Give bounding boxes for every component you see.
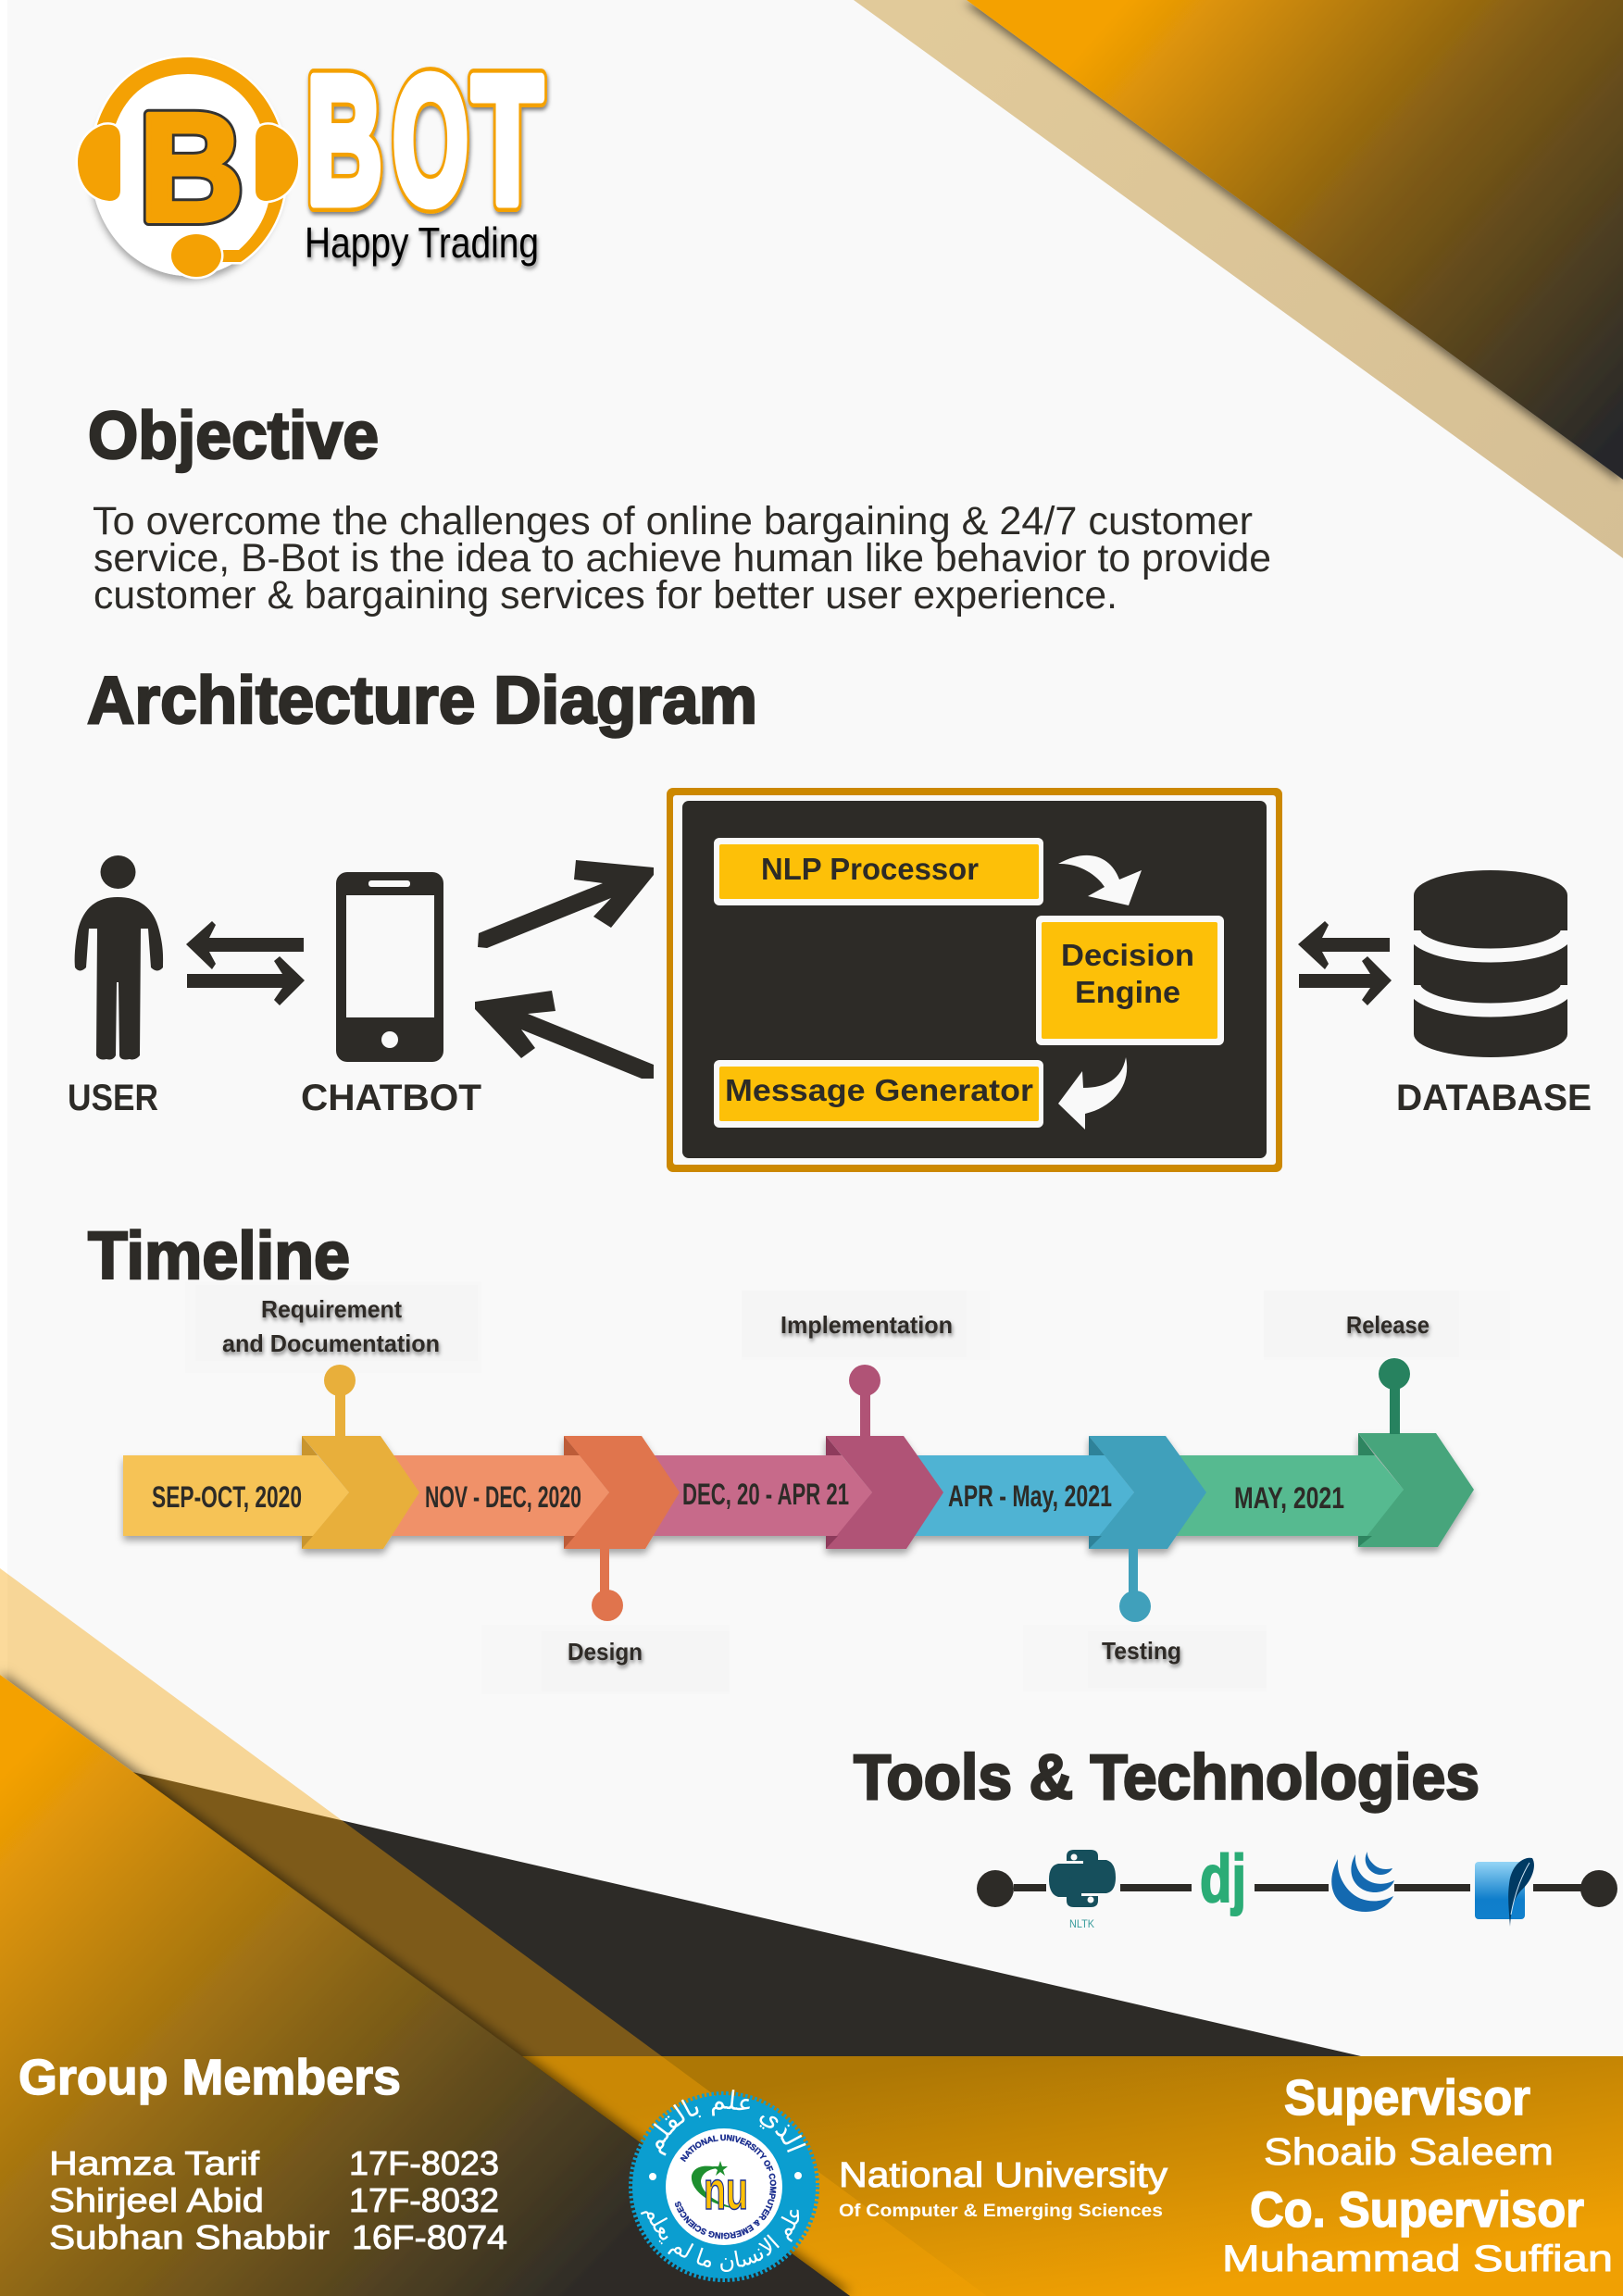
member: Shirjeel Abid: 17F-8032 [349, 2181, 499, 2219]
label: USER: USER [68, 1078, 158, 1118]
text block: objective description: customer & bargaining services for better user experience. [94, 573, 1117, 618]
member: Hamza Tarif [49, 2144, 499, 2182]
heading: Supervisor: Supervisor [1284, 2070, 1530, 2126]
top right corner decoration [854, 0, 1623, 558]
member: Shirjeel Abid: Shirjeel Abid [49, 2181, 264, 2219]
logo wordmark BOT: T [472, 39, 543, 242]
pin: release [1379, 1358, 1410, 1434]
icon: headset and B letter: B [139, 82, 243, 254]
milestone labels: and Documentation [222, 1329, 440, 1357]
university seal [629, 2090, 819, 2282]
text block: objective description: service, B-Bot is the idea to achieve human like behavior to provide [94, 536, 1271, 580]
member: Hamza Tarif: 17F-8023 [349, 2144, 499, 2182]
member: Subhan Shabbir: Subhan Shabbir [49, 2218, 330, 2256]
band labels: SEP-OCT, 2020 [152, 1480, 302, 1514]
logo: B-Bot headset [78, 39, 543, 277]
faint label panels [185, 1281, 1510, 1694]
timeline chart [123, 1281, 1510, 1694]
logo wordmark BOT [306, 39, 543, 242]
milestone labels: Testing [1102, 1637, 1181, 1665]
pin: testing [1119, 1549, 1151, 1622]
icon: python NLTK: NLTK [1069, 1917, 1094, 1930]
logo wordmark BOT: O [393, 39, 468, 242]
label: DATABASE: DATABASE [1396, 1078, 1592, 1118]
icon: python NLTK [1049, 1850, 1116, 1930]
university name: Of Computer & Emerging Sciences [839, 2202, 1163, 2221]
band labels: MAY, 2021 [1234, 1481, 1344, 1515]
university seal: NATIONAL UNIVERSITY OF COMPUTER & EMERGING SCIENCES [674, 2135, 776, 2239]
panel: core engine [667, 788, 1282, 1172]
milestone labels: Implementation [780, 1311, 953, 1339]
heading: Architecture Diagram: Architecture Diagram [87, 664, 757, 738]
box: Decision Engine: Decision [1061, 938, 1194, 972]
icon: database [1414, 870, 1567, 1057]
arrows: user to chatbot [186, 921, 305, 1005]
university name [839, 2156, 1167, 2221]
logo wordmark BOT: O [393, 39, 468, 242]
milestone labels: Requirement [261, 1295, 402, 1323]
university seal: الذي علم بالقلم [654, 2090, 806, 2156]
university name: National University [839, 2156, 1167, 2195]
arrow: decision to message [1058, 1057, 1127, 1129]
text block: objective description [93, 499, 1271, 618]
bottom decoration shapes [0, 1568, 1623, 2296]
box: Message Generator: Message Generator [725, 1073, 1033, 1107]
arrow: NLP to decision [1058, 855, 1142, 905]
architecture diagram [68, 788, 1592, 1172]
pin: implementation [849, 1365, 880, 1437]
band labels [152, 1478, 1344, 1515]
logo tagline: Happy Trading [305, 218, 539, 267]
arrows: core to database [1298, 921, 1392, 1005]
box: Decision Engine [1036, 916, 1224, 1045]
member: Shirjeel Abid [49, 2181, 499, 2219]
supervisors [1222, 2070, 1613, 2279]
icon: jquery [1331, 1852, 1394, 1912]
heading: Timeline: Timeline [88, 1219, 350, 1293]
icon: django: dj [1200, 1842, 1246, 1916]
logo wordmark BOT: B [306, 39, 382, 242]
band labels: DEC, 20 - APR 21 [682, 1478, 849, 1511]
arrow: core to chatbot [475, 991, 654, 1079]
logo wordmark BOT: T [472, 39, 543, 242]
icon: chatbot phone [336, 872, 443, 1062]
heading: Tools & Technologies: Tools & Technologies [854, 1741, 1479, 1813]
band labels: NOV - DEC, 2020 [425, 1480, 581, 1514]
university seal: nu [704, 2161, 748, 2221]
milestone labels: Release [1346, 1311, 1429, 1339]
arrow: chatbot to core [478, 860, 654, 948]
university seal: علم الانسان ما لم يعلم [641, 2209, 800, 2272]
pin: design [592, 1549, 623, 1621]
band labels: APR - May, 2021 [948, 1479, 1112, 1513]
milestone labels: Design [568, 1638, 643, 1666]
tools row [977, 1842, 1617, 1930]
connector line and end dots [977, 1870, 1617, 1907]
member: Subhan Shabbir [49, 2218, 507, 2256]
milestone labels [222, 1295, 1429, 1666]
member: Subhan Shabbir: 16F-8074 [352, 2218, 507, 2256]
icon: sqlite [1475, 1858, 1534, 1927]
icon: headset and B letter [78, 57, 298, 277]
box: NLP Processor: NLP Processor [761, 852, 979, 886]
text block: objective description: To overcome the challenges of online bargaining & 24/7 customer [93, 499, 1253, 543]
icon: headset and B letter: B [139, 82, 243, 254]
heading: Co. Supervisor: Co. Supervisor [1250, 2182, 1584, 2238]
group members [19, 2050, 507, 2256]
pin: requirement [324, 1365, 356, 1437]
box: Decision Engine: Engine [1075, 975, 1180, 1009]
name: Shoaib Saleem: Shoaib Saleem [1264, 2130, 1554, 2173]
heading: Objective: Objective [88, 399, 379, 473]
icon: user [75, 855, 163, 1059]
box: Message Generator [714, 1060, 1043, 1128]
box: NLP Processor [714, 838, 1043, 905]
label: CHATBOT: CHATBOT [301, 1078, 481, 1118]
timeline arrow bands [123, 1433, 1474, 1549]
name: Muhammad Suffian: Muhammad Suffian [1222, 2239, 1613, 2279]
member: Hamza Tarif: Hamza Tarif [49, 2144, 260, 2182]
logo wordmark BOT: B [306, 39, 382, 242]
heading: Group Members: Group Members [19, 2050, 401, 2105]
